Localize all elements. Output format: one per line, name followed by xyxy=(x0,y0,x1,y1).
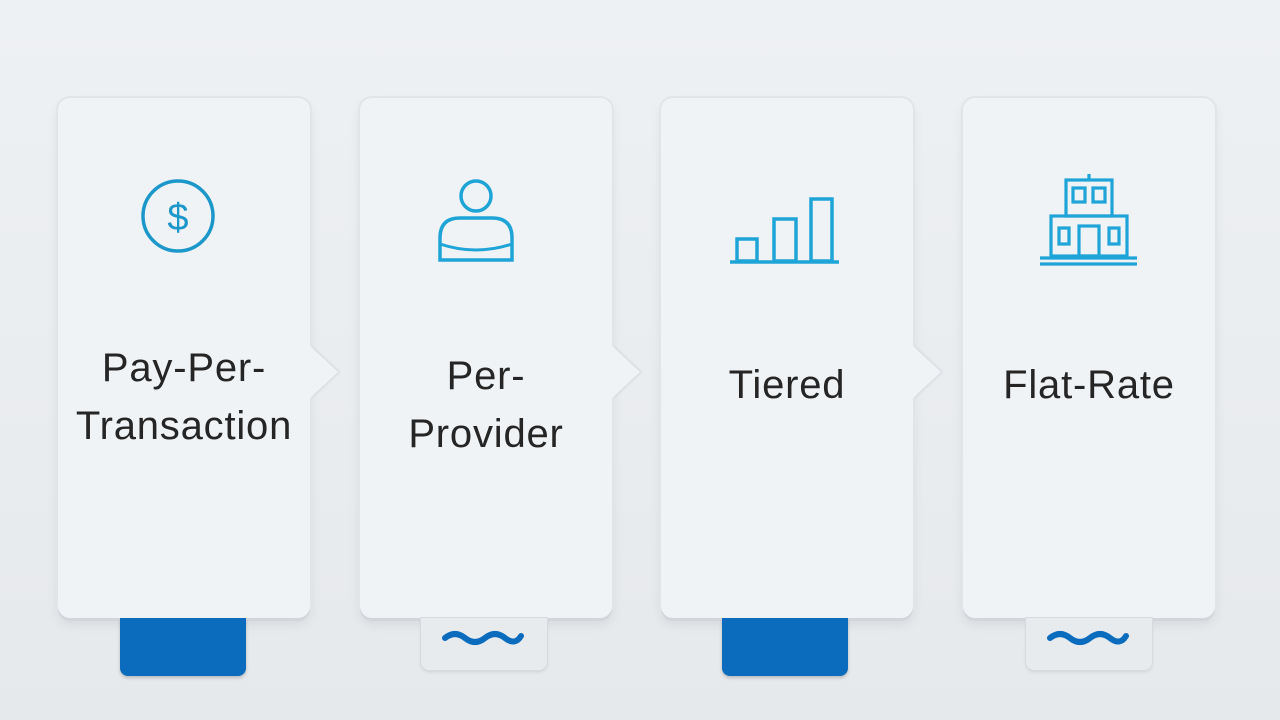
icon: dollar coin: $ xyxy=(167,197,189,239)
icon: person xyxy=(438,179,514,262)
label: Transaction xyxy=(76,404,292,448)
card: tiered xyxy=(661,98,913,618)
tab 2 xyxy=(421,618,547,670)
arrow xyxy=(612,346,640,398)
icon: bar chart xyxy=(730,197,839,264)
label xyxy=(408,354,564,456)
label: Pay-Per- xyxy=(102,346,266,390)
label xyxy=(76,346,292,448)
wave xyxy=(1047,630,1129,646)
label: Provider xyxy=(408,412,564,456)
label: Tiered xyxy=(729,363,845,407)
tab 4 xyxy=(1026,618,1152,670)
tab 3 xyxy=(722,618,848,676)
card: pay-per-transaction xyxy=(58,98,310,618)
arrow xyxy=(310,346,338,398)
arrow xyxy=(913,346,941,398)
card: per-provider xyxy=(360,98,612,618)
label: Per- xyxy=(447,354,525,398)
label: Flat-Rate xyxy=(1003,363,1175,407)
icon: building xyxy=(1040,174,1137,266)
icon: dollar coin xyxy=(141,179,215,253)
wave xyxy=(442,630,524,646)
card: flat-rate xyxy=(963,98,1215,618)
tab 1 xyxy=(120,618,246,676)
